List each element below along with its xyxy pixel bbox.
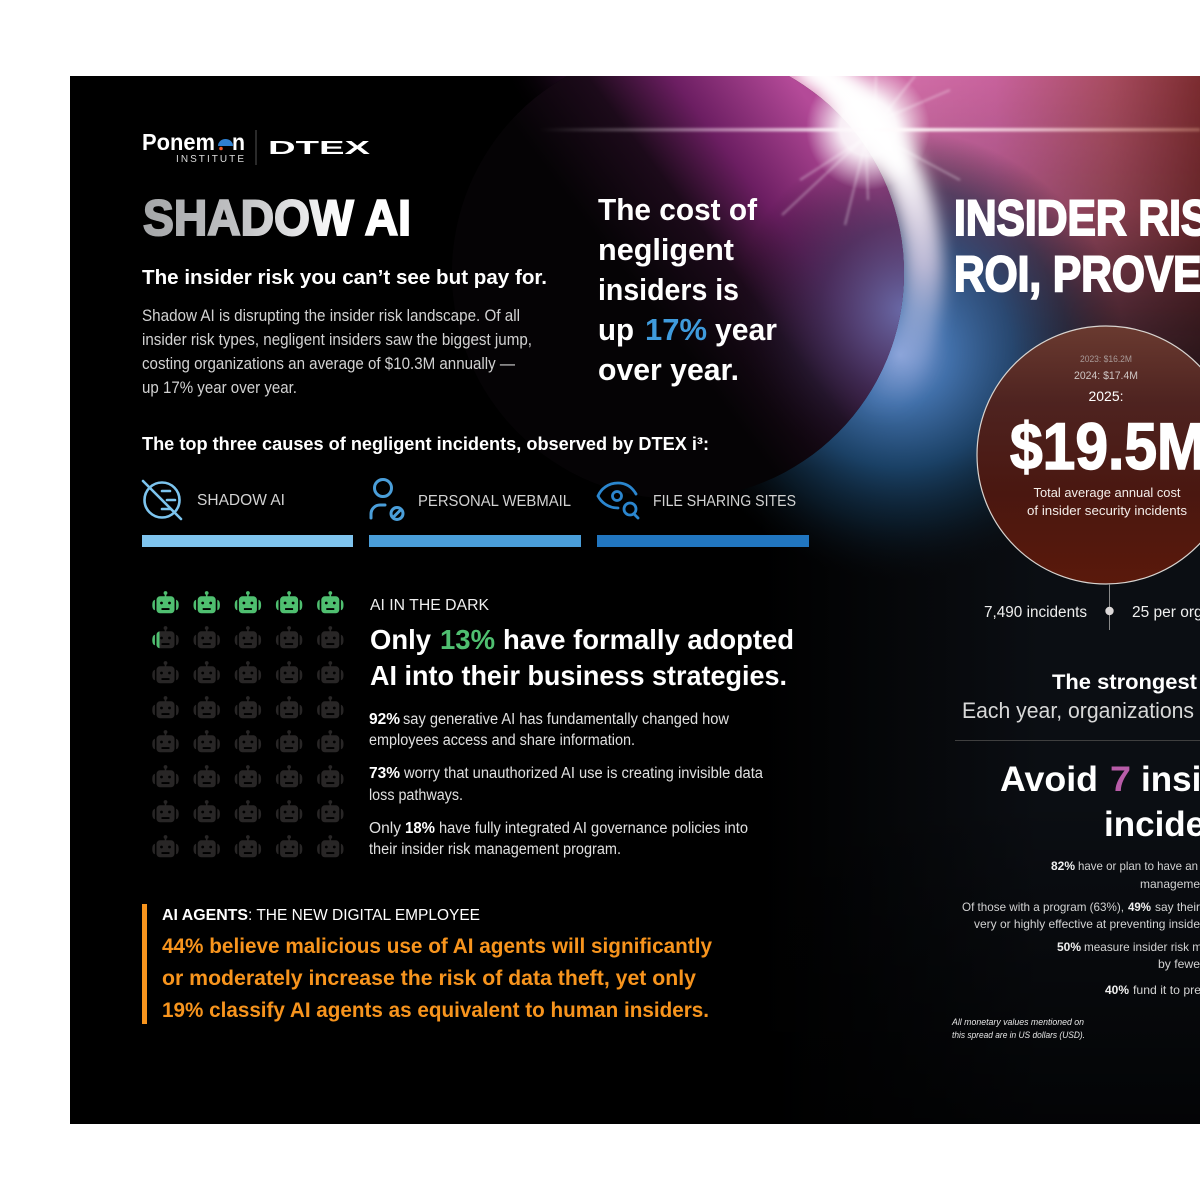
stat: 73%: worry that unauthorized AI use is creating invisible data — [403, 765, 763, 782]
cause: Personal webmail — [369, 480, 581, 547]
headline: avoid 7 incidents: Avoid — [1000, 760, 1098, 799]
section: AI in the dark — [369, 597, 794, 858]
cause: Personal webmail: PERSONAL WEBMAIL — [418, 493, 571, 510]
heading: strongest — [962, 671, 1197, 723]
heading: strongest: Each year, organizations — [962, 698, 1194, 723]
circle: total annual cost: 2023: $16.2M — [1080, 354, 1132, 364]
callout: cost up 17%: over year. — [598, 352, 739, 387]
callout: cost up 17%: negligent — [598, 232, 734, 267]
callout: AI agents: or moderately increase the risk of data theft, yet only — [162, 967, 696, 990]
headline: 13% adopted — [370, 624, 794, 691]
stat: 92% — [369, 711, 730, 749]
circle: total annual cost: 2025: — [1088, 388, 1124, 404]
stats: incidents — [984, 584, 1200, 630]
cause: Shadow AI: SHADOW AI — [197, 492, 285, 509]
callout: cost up 17%: year — [715, 312, 777, 347]
intro paragraph: insider risk types, negligent insiders saw the biggest jump, — [142, 331, 532, 349]
callout: AI agents: 44% believe malicious use of AI agents will significantly — [162, 935, 712, 958]
circle: total annual cost: 2024: $17.4M — [1074, 370, 1138, 382]
icon: crossed-out AI chip — [143, 481, 181, 519]
stat: 73% — [369, 765, 763, 804]
icon: person with block sign — [371, 480, 403, 520]
stat: 18% — [369, 820, 748, 858]
headline: 13% adopted: AI into their business strategies. — [370, 660, 787, 691]
stat: 92%: employees access and share information. — [369, 732, 635, 749]
cause: Shadow AI — [142, 481, 353, 547]
subtitle: The insider risk you can’t see but pay for. — [142, 267, 547, 289]
logos: Ponemon Institute and DTEX: DTEX — [268, 138, 370, 158]
stat: 18%: their insider risk management program. — [369, 841, 621, 858]
title: Shadow AI: SHADOW AI — [143, 190, 411, 246]
list: program stats: say their — [1155, 900, 1200, 914]
callout: AI agents: : THE NEW DIGITAL EMPLOYEE — [248, 907, 480, 924]
logos: Ponemon Institute and DTEX: n — [232, 129, 245, 155]
stat: 18%: have fully integrated AI governance policies into — [439, 820, 748, 837]
stat: 18%: Only — [369, 820, 401, 837]
icon grid: 40 robots, 13% green — [152, 591, 343, 857]
footnote: this spread are in US dollars (USD). — [952, 1030, 1085, 1041]
callout: AI agents: 19% classify AI agents as equivalent to human insiders. — [162, 999, 709, 1022]
list: program stats: 49% — [1128, 900, 1151, 914]
cause: File sharing sites — [597, 483, 809, 547]
intro paragraph: up 17% year over year. — [142, 379, 297, 397]
stat: 73%: loss pathways. — [369, 787, 463, 804]
list: program stats: 82% — [1051, 859, 1075, 873]
list: program stats: by fewe — [1158, 957, 1200, 971]
heading: top three causes: The top three causes of negligent incidents, observed by DTEX i³: — [142, 434, 709, 454]
list: program stats: fund it to pre — [1133, 983, 1200, 997]
stat: 92%: 92% — [369, 711, 400, 728]
cause: File sharing sites: FILE SHARING SITES — [653, 493, 796, 510]
stat: 18%: 18% — [405, 820, 435, 837]
callout: AI agents: AI AGENTS — [162, 907, 248, 924]
circle: total annual cost — [977, 326, 1200, 584]
list: program stats: have or plan to have an — [1078, 859, 1198, 873]
list: program stats: 40% — [1105, 983, 1129, 997]
title: Insider risk ROI — [954, 190, 1200, 302]
headline: avoid 7 incidents — [1000, 760, 1200, 844]
footnote: All monetary values mentioned on — [951, 1017, 1084, 1028]
logos: Ponemon Institute and DTEX: INSTITUTE — [176, 154, 244, 165]
headline: 13% adopted: have formally adopted — [503, 624, 794, 655]
headline: 13% adopted: Only — [370, 624, 431, 655]
stats: incidents: 7,490 incidents — [984, 604, 1087, 621]
section: AI in the dark: AI IN THE DARK — [370, 597, 489, 614]
footnote — [951, 1017, 1085, 1041]
callout: cost up 17% — [598, 192, 777, 387]
intro paragraph — [142, 307, 532, 397]
heading: strongest: The strongest — [1052, 671, 1197, 694]
headline: avoid 7 incidents: insi — [1141, 760, 1200, 799]
list: program stats: very or highly effective at preventing inside — [974, 917, 1200, 931]
stat: 92%: say generative AI has fundamentally changed how — [403, 711, 730, 728]
list: program stats: 50% — [1057, 940, 1081, 954]
callout: cost up 17%: up — [598, 312, 634, 347]
intro paragraph: Shadow AI is disrupting the insider risk landscape. Of all — [142, 307, 520, 325]
list: program stats — [962, 859, 1200, 997]
callout: AI agents — [142, 904, 712, 1024]
callout: cost up 17%: insiders is — [598, 272, 739, 307]
headline: avoid 7 incidents: 7 — [1110, 760, 1131, 799]
headline: 13% adopted: 13% — [440, 624, 495, 655]
list: program stats: Of those with a program (63%), — [962, 900, 1124, 914]
stat: 73%: 73% — [369, 765, 400, 782]
logos: Ponemon Institute and DTEX — [142, 129, 370, 165]
icon: eye with magnifier — [598, 483, 638, 518]
circle: total annual cost: of insider security incidents — [1027, 503, 1188, 518]
circle: total annual cost: Total average annual cost — [1034, 485, 1181, 500]
callout: cost up 17%: 17% — [645, 312, 707, 347]
intro paragraph: costing organizations an average of $10.3M annually — — [142, 355, 515, 373]
callout: cost up 17%: The cost of — [598, 192, 758, 227]
logos: Ponemon Institute and DTEX: Ponem — [142, 129, 215, 155]
